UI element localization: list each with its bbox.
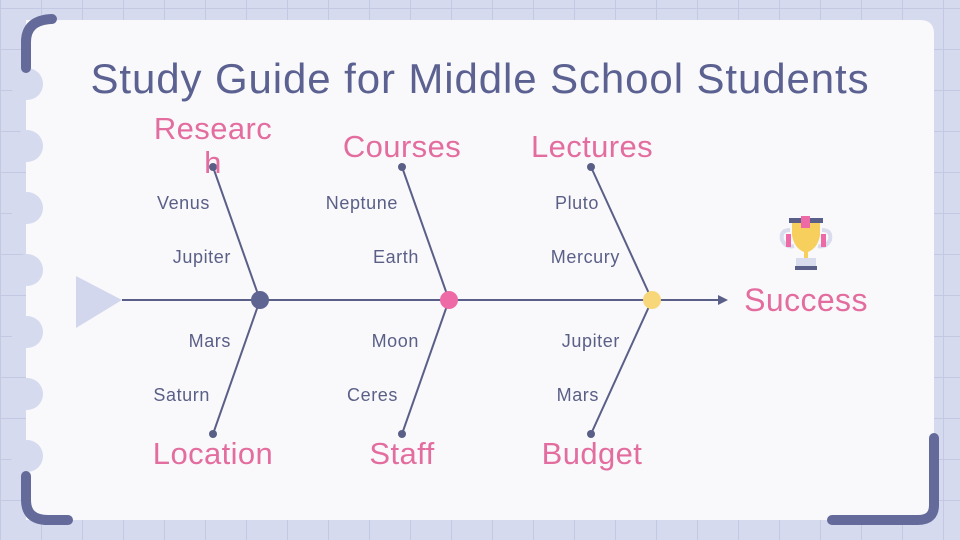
heading: Courses: Courses (343, 129, 461, 164)
icon: trophy (782, 216, 830, 270)
text: Mars (189, 331, 231, 351)
heading: Staff: Staff (369, 436, 435, 471)
text: Moon (372, 331, 419, 351)
title: Study Guide for Middle School Students (91, 55, 869, 102)
text: Saturn (153, 385, 210, 405)
heading: Research: h (204, 145, 222, 180)
text: Pluto (555, 193, 599, 213)
icon: head triangle (76, 276, 122, 328)
text: Mercury (551, 247, 620, 267)
heading: Research: Researc (154, 111, 272, 146)
heading: Research (154, 111, 272, 180)
text: Ceres (347, 385, 398, 405)
heading: Budget: Budget (542, 436, 642, 471)
text: Mars (557, 385, 599, 405)
text: Neptune (326, 193, 398, 213)
text: Jupiter (562, 331, 620, 351)
text: Jupiter (173, 247, 231, 267)
heading: Location: Location (153, 436, 273, 471)
text: Venus (157, 193, 210, 213)
heading: Success: Success (744, 282, 868, 318)
text: Earth (373, 247, 419, 267)
labels (153, 193, 620, 405)
heading: Lectures: Lectures (531, 129, 653, 164)
